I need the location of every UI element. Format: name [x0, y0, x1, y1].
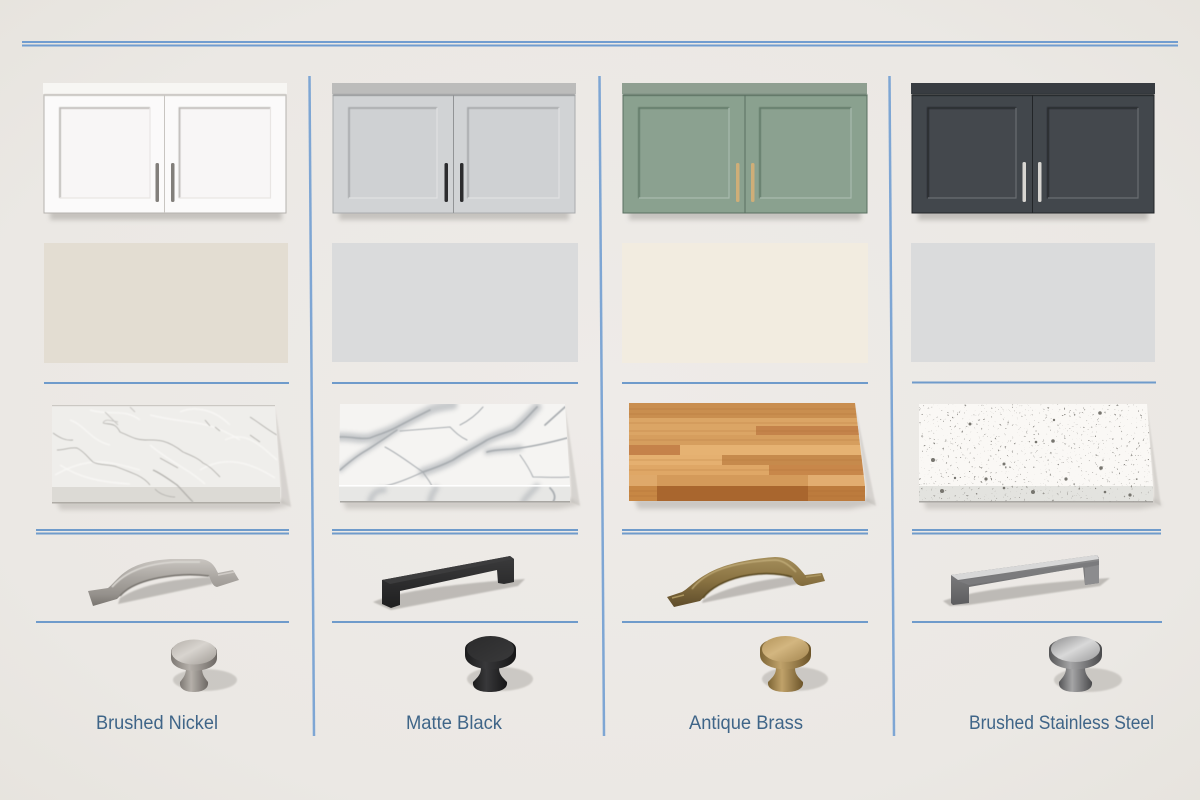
- cabinet: sage green shaker: [622, 83, 867, 220]
- divider: [332, 382, 578, 384]
- cabinet knob: black: [465, 636, 533, 692]
- divider: [332, 621, 578, 623]
- wall paint swatch: warm beige: [44, 243, 288, 363]
- double divider: [622, 529, 868, 534]
- countertop: soft white quartz: [52, 405, 291, 510]
- countertop: butcher block wood: [629, 403, 876, 509]
- countertop: bold-veined marble: [339, 404, 580, 509]
- double divider: [36, 529, 289, 534]
- label: Brushed Stainless Steel: [969, 712, 1154, 734]
- cabinet: light grey shaker: [332, 83, 576, 220]
- label: Brushed Nickel: [96, 712, 218, 734]
- cabinet knob: brass: [760, 636, 828, 692]
- divider: [36, 621, 289, 623]
- divider: [44, 382, 289, 384]
- double divider: [332, 529, 578, 534]
- cabinet: charcoal shaker: [911, 83, 1155, 220]
- cabinet pull: arched brass: [667, 557, 825, 607]
- panel: Brushed Stainless Steel palette: [911, 83, 1163, 734]
- top double rule: [22, 41, 1178, 46]
- divider: [912, 382, 1156, 384]
- wall paint swatch: pale grey: [332, 243, 578, 362]
- divider: [912, 621, 1162, 623]
- countertop: speckled quartz: [915, 400, 1163, 509]
- cabinet: white shaker: [43, 83, 287, 220]
- cabinet pull: square black: [373, 556, 525, 610]
- cabinet pull: square steel: [943, 555, 1110, 606]
- label: Matte Black: [406, 712, 502, 734]
- cabinet knob: nickel: [171, 640, 237, 692]
- cabinet pull: arched nickel: [88, 559, 239, 606]
- panel: Antique Brass palette: [622, 83, 876, 734]
- cabinet knob: steel: [1049, 636, 1122, 692]
- column dividers: [310, 76, 894, 736]
- divider: [622, 382, 868, 384]
- label: Antique Brass: [689, 712, 803, 734]
- panel: Brushed Nickel palette: [36, 83, 291, 734]
- wall paint swatch: cream: [622, 243, 868, 363]
- panel: Matte Black palette: [332, 83, 580, 734]
- wall paint swatch: cool grey: [911, 243, 1155, 362]
- divider: [622, 621, 868, 623]
- double divider: [912, 529, 1161, 534]
